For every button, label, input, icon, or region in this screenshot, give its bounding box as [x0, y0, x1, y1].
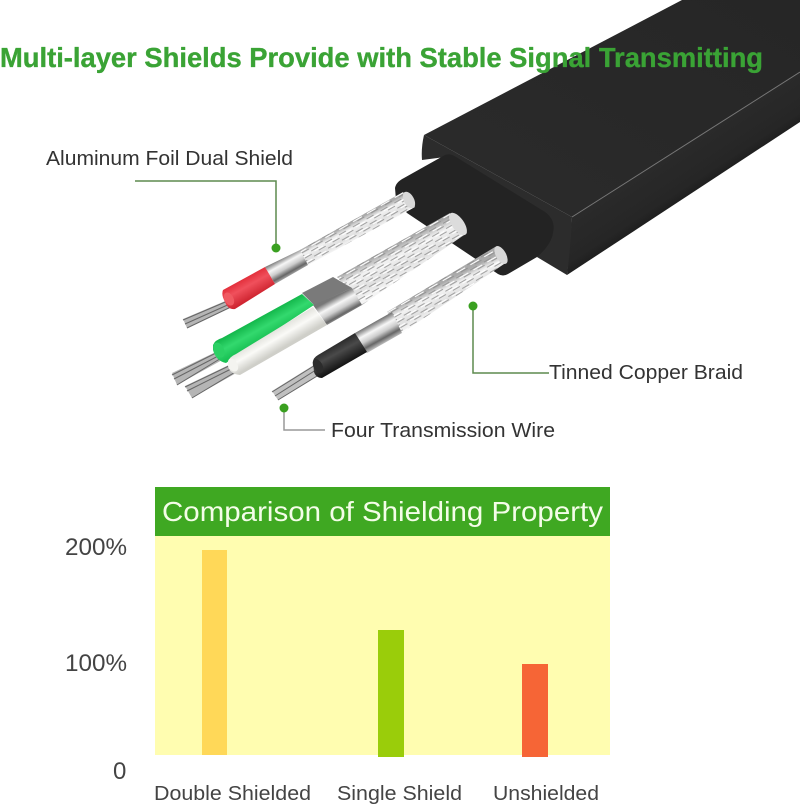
black wire braid [387, 244, 510, 333]
bar: single shield [378, 630, 404, 757]
wire group: red [183, 190, 418, 328]
y axis labels: 200% [65, 534, 127, 561]
callout: transmission wire: Four Transmission Wire [331, 420, 555, 442]
red wire braid [300, 190, 418, 265]
chart header: Comparison of Shielding Property [162, 496, 603, 527]
green wire strands [172, 350, 224, 385]
title: Multi-layer Shields Provide with Stable Signal Transmitting [0, 42, 763, 73]
callout: tinned copper braid [468, 302, 743, 384]
bar chart panel [65, 487, 610, 805]
red wire strands [183, 299, 233, 328]
centre wire grey foil [302, 277, 352, 305]
centre wire braid [337, 210, 470, 305]
bar: unshielded [522, 664, 548, 757]
x axis labels [154, 783, 599, 805]
chart header [155, 487, 610, 536]
x axis labels: Unshielded [493, 783, 599, 805]
white insulation [228, 307, 327, 375]
cable front face [422, 135, 572, 275]
red wire foil [265, 250, 308, 284]
black insulation [313, 333, 367, 378]
chart plot background [155, 536, 610, 755]
bar: double shielded [202, 550, 227, 755]
cable side face [567, 72, 800, 275]
green insulation end [211, 341, 227, 359]
cable ridge highlight [572, 72, 800, 217]
y axis labels: 100% [65, 650, 127, 677]
green insulation [213, 294, 314, 363]
red insulation end [222, 291, 236, 307]
x axis labels: Double Shielded [154, 783, 311, 805]
white wire strands [185, 363, 238, 398]
centre wire silver foil [313, 288, 362, 325]
black wire strands [272, 363, 322, 400]
black flat cable [395, 0, 800, 276]
wire group: black [272, 244, 510, 400]
white insulation end [226, 357, 240, 373]
x axis labels: Single Shield [337, 783, 462, 805]
y axis labels [65, 534, 127, 785]
callout: tinned copper braid: Tinned Copper Braid [549, 362, 743, 384]
black insulation end [311, 357, 325, 375]
wire group: green and white [172, 210, 470, 398]
callout: transmission wire [280, 404, 555, 442]
cable top face [424, 0, 800, 217]
black wire foil [355, 312, 402, 353]
red insulation [222, 267, 275, 309]
y axis labels: 0 [113, 758, 126, 785]
inner jacket [395, 154, 554, 276]
callout: aluminum foil [46, 148, 293, 252]
callout: aluminum foil: Aluminum Foil Dual Shield [46, 148, 293, 170]
